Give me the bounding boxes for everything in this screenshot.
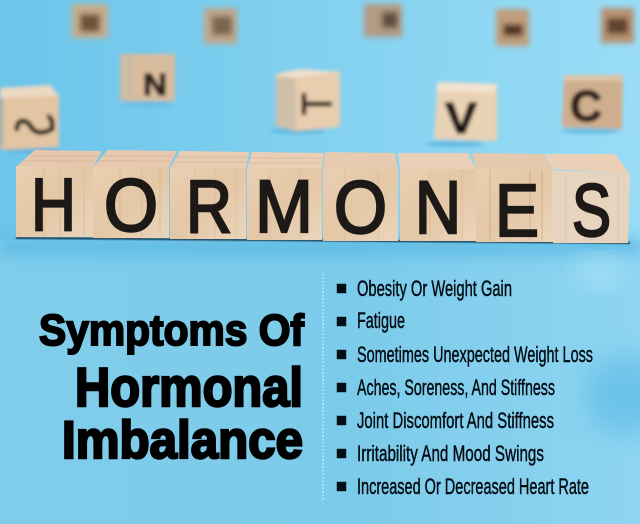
symptom list xyxy=(337,276,593,499)
cube: C xyxy=(560,75,623,134)
cube E xyxy=(472,153,553,252)
blurred background letter cubes xyxy=(0,4,634,153)
title line: Symptoms Of: Symptoms Of xyxy=(39,306,304,355)
cube: far fifth xyxy=(601,8,634,43)
cube: far fourth xyxy=(496,9,529,46)
title line: Hormonal: Hormonal xyxy=(75,356,303,418)
cube S: S xyxy=(572,169,611,252)
cube: sideways S xyxy=(0,85,60,153)
cube: V: V xyxy=(445,94,478,143)
cube M: M xyxy=(255,165,313,248)
cube: sideways T xyxy=(270,69,340,134)
cube O: O xyxy=(334,166,387,249)
cube S xyxy=(544,154,630,252)
cube: N: N xyxy=(143,67,167,102)
cube O xyxy=(93,150,177,247)
item: aches xyxy=(337,375,555,400)
cube: far second xyxy=(204,8,237,44)
title line: Imbalance: Imbalance xyxy=(62,411,303,470)
cube M xyxy=(247,152,324,248)
cube R xyxy=(170,151,249,248)
cube: far third xyxy=(364,4,402,37)
cube O xyxy=(323,152,398,249)
cube H xyxy=(16,150,102,246)
item: obesity: Obesity Or Weight Gain xyxy=(357,276,512,301)
cube H: H xyxy=(31,163,76,246)
item: joint xyxy=(337,408,554,433)
item: irritability xyxy=(337,441,544,466)
item: obesity xyxy=(337,276,512,301)
item: irritability: Irritability And Mood Swings xyxy=(357,441,544,466)
cube N: N xyxy=(415,166,461,249)
cube: far left xyxy=(72,4,108,38)
cube: V xyxy=(425,82,497,147)
item: fatigue xyxy=(337,308,405,333)
cube: C: C xyxy=(570,82,602,131)
cube O: O xyxy=(104,164,158,247)
cube E: E xyxy=(495,169,539,252)
item: fatigue: Fatigue xyxy=(357,308,405,333)
title xyxy=(39,306,304,470)
HORMONES cube row xyxy=(16,150,630,252)
cube: N xyxy=(120,54,175,107)
cube N xyxy=(398,153,476,249)
cube R: R xyxy=(186,165,232,248)
